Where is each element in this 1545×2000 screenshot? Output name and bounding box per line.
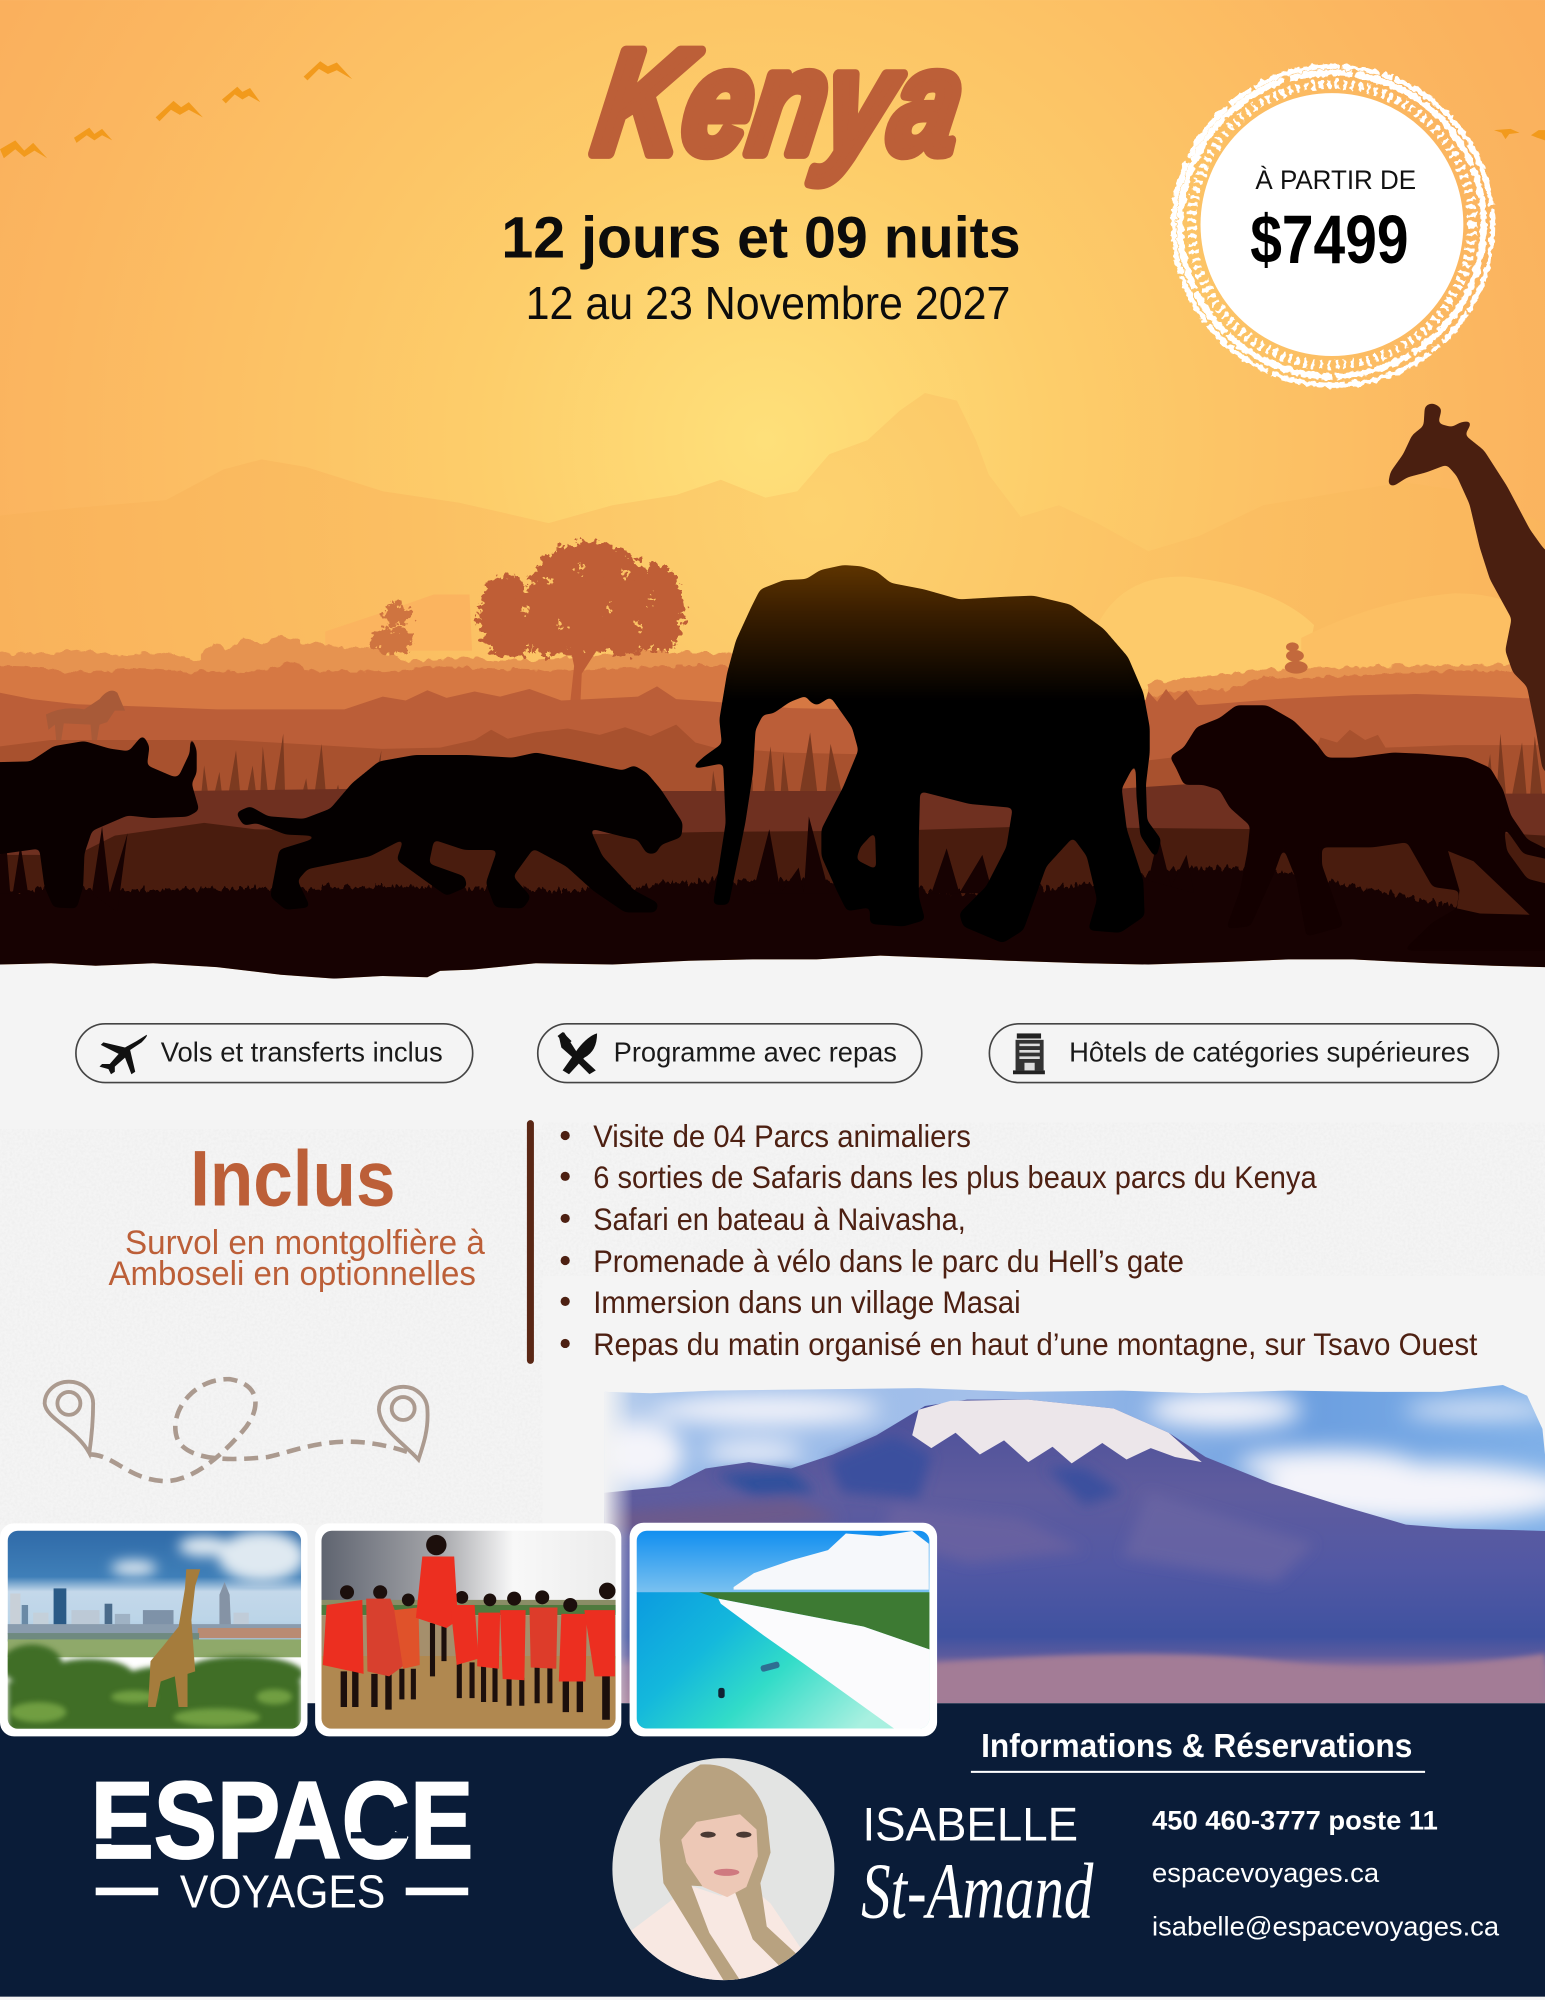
birds <box>0 61 1545 158</box>
faint zebra silhouette <box>46 691 125 740</box>
snow cap <box>912 1400 1202 1463</box>
photo card: Maasai dancers <box>315 1523 621 1736</box>
eyes <box>700 1832 751 1838</box>
optional note <box>108 1224 486 1293</box>
contact details: isabelle@espacevoyages.ca <box>1152 1911 1499 1941</box>
optional note: Survol en montgolfière à <box>125 1224 486 1262</box>
rhino silhouette <box>0 731 199 908</box>
title: Kenya: Kenya <box>586 19 974 185</box>
icon: fork and knife <box>558 1032 597 1074</box>
logo: Espace Voyages: VOYAGES <box>180 1865 385 1917</box>
included list: Immersion dans un village Masai <box>593 1284 1021 1320</box>
giraffe <box>148 1569 200 1707</box>
hair <box>660 1764 800 1980</box>
included list: Safari en bateau à Naivasha, <box>593 1201 966 1237</box>
included list <box>561 1118 1478 1362</box>
optional note: Amboseli en optionnelles <box>108 1255 476 1293</box>
price amount: $7499 <box>1250 201 1408 278</box>
footer band <box>0 1703 1545 1997</box>
face <box>681 1814 758 1897</box>
photo: Mount Kilimanjaro <box>592 1384 1545 1703</box>
icon: hotel <box>1013 1033 1045 1074</box>
advisor name: St-Amand <box>861 1849 1094 1936</box>
pill text: Vols et transferts inclus <box>161 1036 443 1067</box>
contact details: espacevoyages.ca <box>1152 1858 1379 1888</box>
included list: Visite de 04 Parcs animaliers <box>593 1118 971 1154</box>
vertical divider <box>527 1120 534 1364</box>
price badge <box>1174 66 1493 385</box>
mountain body <box>605 1400 1545 1703</box>
savanna band 1 <box>0 635 732 674</box>
shirt <box>625 1886 817 1985</box>
advisor name <box>861 1798 1094 1936</box>
advisor name: ISABELLE <box>862 1798 1078 1851</box>
feature pill: hotels <box>989 1024 1498 1083</box>
paper texture patches <box>0 1123 1545 1525</box>
included list: Repas du matin organisé en haut d’une montagne, sur Tsavo Ouest <box>593 1326 1478 1362</box>
lion silhouette <box>1171 705 1545 921</box>
photo card: giraffe and Nairobi skyline <box>0 1523 307 1736</box>
lips <box>714 1869 739 1876</box>
savanna band 3 <box>0 686 1538 760</box>
sky <box>0 0 1545 995</box>
hero: savanna illustration <box>0 0 1545 1021</box>
feature pill: flights <box>76 1024 473 1083</box>
dark reeds <box>0 816 1190 894</box>
logo: Espace Voyages <box>91 1760 473 1917</box>
dancer robes <box>323 1557 615 1682</box>
savanna band 1 right <box>1148 662 1512 698</box>
dancer legs and heads <box>340 1535 616 1720</box>
advisor portrait <box>610 1756 837 1985</box>
small tree <box>370 603 413 665</box>
price label: À PARTIR DE <box>1255 165 1416 195</box>
beach <box>718 1599 930 1729</box>
reeds behind animals <box>202 732 1542 794</box>
foreground dark grass <box>0 864 1545 979</box>
icon: plane <box>100 1035 147 1074</box>
pill text: Programme avec repas <box>614 1036 897 1067</box>
clouds <box>592 1392 1545 1523</box>
lion lower legs gap <box>1448 851 1530 915</box>
contact heading: Informations & Réservations <box>981 1728 1412 1765</box>
distant mountains <box>301 393 978 662</box>
tree line <box>699 1592 930 1650</box>
savanna band 4 <box>0 724 1545 794</box>
icon: dashed travel route with pins <box>45 1379 428 1481</box>
contact details: 450 460-3777 poste 11 <box>1152 1806 1438 1836</box>
lioness silhouette <box>236 753 683 912</box>
feature pill: meals <box>538 1024 922 1083</box>
logo: Espace Voyages: ESPACE <box>91 1760 473 1882</box>
boats <box>718 1661 780 1698</box>
subtitle: duration: 12 jours et 09 nuits <box>501 206 1021 271</box>
pill text: Hôtels de catégories supérieures <box>1069 1036 1470 1067</box>
included list: Promenade à vélo dans le parc du Hell’s gate <box>593 1243 1184 1279</box>
mountain shadows <box>605 1435 1314 1582</box>
savanna band 5 <box>0 784 1545 855</box>
lower brown slopes <box>931 1653 1545 1703</box>
included list: 6 sorties de Safaris dans les plus beaux parcs du Kenya <box>593 1159 1317 1195</box>
savanna band 2 <box>0 662 1530 710</box>
heading: Inclus: Inclus <box>190 1134 395 1223</box>
giraffe silhouette <box>1388 403 1545 791</box>
left fade <box>602 1384 633 1703</box>
pale foreground hills <box>325 577 1518 689</box>
big acacia tree <box>478 542 684 702</box>
grass clump right of elephant <box>1145 689 1198 708</box>
contact details <box>1152 1806 1499 1941</box>
elephant silhouette <box>690 565 1161 943</box>
clouds <box>734 1531 929 1590</box>
tiny far tree <box>1285 642 1308 674</box>
photo card: Diani beach <box>630 1523 937 1736</box>
dates: 12 au 23 Novembre 2027 <box>526 277 1010 329</box>
savanna band 6 <box>7 822 1545 908</box>
